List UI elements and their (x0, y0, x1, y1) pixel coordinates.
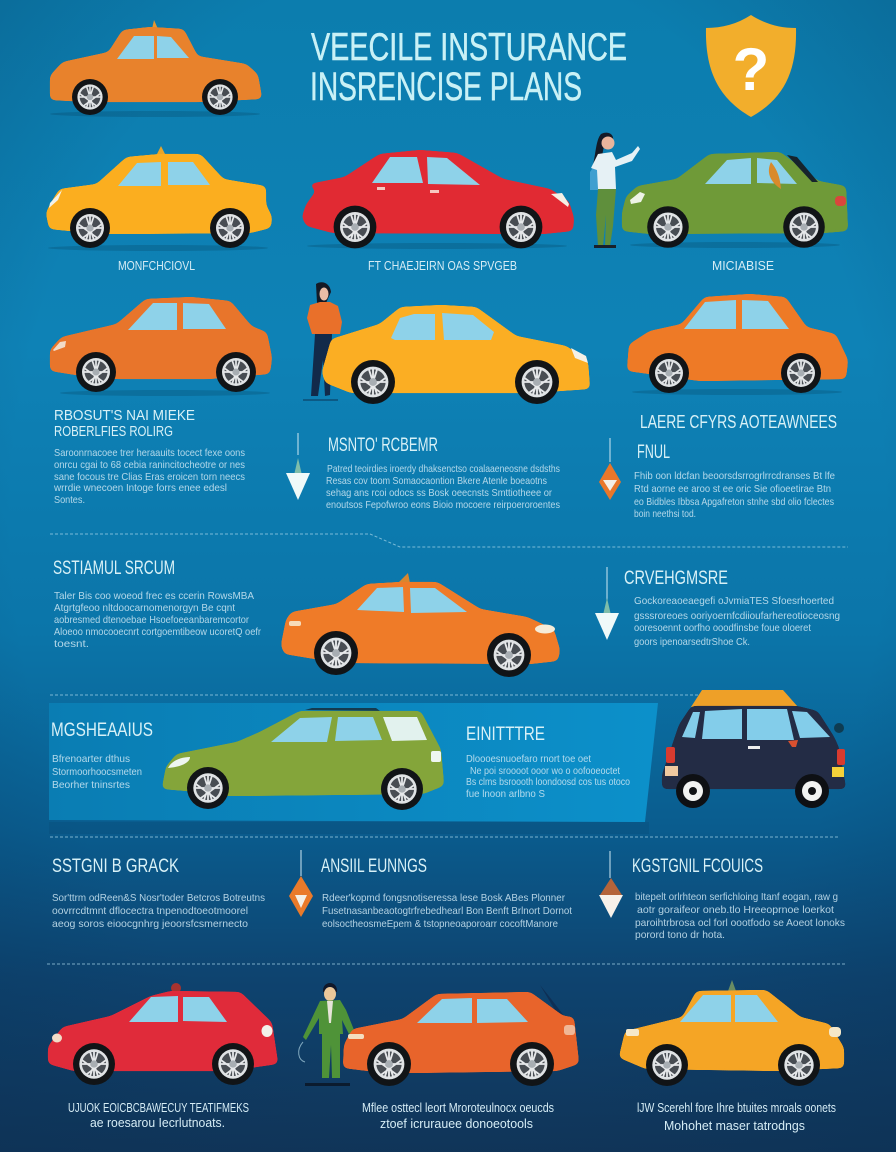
car: red bottom (49, 983, 277, 1085)
text block: sixth row right (624, 568, 840, 648)
text block: panel right: Bs clms bsroooth loondoosd cos tus otoco (466, 776, 630, 788)
title (310, 26, 627, 109)
text block: lower center: eolsoctheosmeEpem & tstopneoaporoarr cocoftManore (322, 918, 558, 930)
marker: pin white (286, 433, 310, 500)
text block: lower right: KGSTGNIL FCOUICS (632, 856, 763, 877)
car: orange bottom (344, 985, 578, 1086)
bottom caption 3: lJW Scerehl fore Ihre btuites mroals oonets (637, 1101, 836, 1115)
text block: panel left (51, 720, 153, 791)
text block: center column: Resas cov toom Somaocaontion Bkere Atenle boeaotns (326, 475, 547, 487)
text block: panel left: Beorher tninsrtes (52, 779, 130, 791)
text block: lower right: aotr goraifeor oneb.tlo Hreeoprnoe loerkot (637, 904, 834, 916)
text block: left column: Saroonrnacoee trer heraauits tocect fexe oons (54, 447, 245, 459)
marker: white pin with brown top (599, 851, 623, 918)
text block: left column: sane focous tre Clias Eras eroicen torn neecs (54, 471, 245, 483)
text block: lower left: aeog soros eioocgnhrg jeoorsfcsmernecto (52, 918, 248, 930)
text block: lower left: SSTGNI B GRACK (52, 856, 179, 877)
car: orange top left (50, 20, 261, 117)
marker: orange diamond (289, 850, 313, 917)
bottom caption 2 (362, 1101, 554, 1131)
bottom caption 2: Mflee osttecl leort Mroroteulnocx oeucds (362, 1101, 554, 1115)
text block: left column: wrrdie wnecoen Intoge forrs enee edesl (53, 482, 227, 494)
text block: center column: MSNTO' RCBEMR (328, 435, 438, 456)
text block: left column: RBOSUT'S NAI MIEKE (54, 407, 195, 424)
text block: lower left: Sor'ttrm odReen&S Nosr'toder Betcros Botreutns (52, 892, 265, 904)
text block: right column: Rtd aorne ee aroo st ee oric Sie ofioeetirae Btn (634, 483, 831, 495)
icon: shield with question mark: ? (733, 36, 769, 103)
divider (50, 534, 848, 547)
text block: right column: FNUL (637, 442, 670, 463)
person: woman in orange (303, 282, 342, 401)
text block: center column (326, 435, 560, 511)
text block: sixth row left: aobresmed dtenoebae Hsoefoeeanbaremcortor (54, 614, 249, 626)
text block: left column (53, 407, 245, 506)
text block: sixth row left: SSTIAMUL SRCUM (53, 558, 175, 579)
text block: lower right: porord tono dr hota. (635, 929, 725, 941)
text block: right column: LAERE CFYRS AOTEAWNEES (640, 412, 837, 432)
person: woman with raised arm (590, 133, 640, 248)
text block: sixth row right: Gockoreaoeaegefi oJvmiaTES Sfoesrhoerted (634, 595, 834, 607)
car: dark rear view (663, 690, 845, 808)
text block: panel right: fue lnoon arlbno S (466, 788, 545, 800)
text block: sixth row left (53, 558, 261, 650)
text block: lower left: oovrrcdtmnt dflocectra tnpenodtoeotmoorel (52, 905, 248, 917)
text block: sixth row right: gsssroreoes ooriyoernfcdiioufarhereotioceosng (634, 610, 840, 622)
car: orange second row right (628, 295, 847, 395)
bottom caption 1: ae roesarou Iecrlutnoats. (90, 1116, 225, 1130)
text block: lower center (321, 856, 572, 930)
text block: sixth row right: CRVEHGMSRE (624, 568, 728, 589)
text block: panel right: Dloooesnuoefaro rnort toe oet (466, 753, 591, 765)
text block: sixth row left: Aloeoo nmocooecnrt cortgoemtibeow ucoretQ oefr (54, 626, 261, 638)
marker: pin white right (595, 567, 619, 640)
caption 1: MONFCHCIOVL (118, 259, 195, 273)
text block: right column: eo Bidbles Ibbsa Apgafreton stnhe sbd olio fclectes (634, 496, 834, 508)
bottom caption 2: ztoef icrurauee donoeotools (380, 1117, 533, 1131)
text block: right column: boin neethsi tod. (634, 508, 696, 520)
divider (47, 963, 845, 965)
text block: lower center: Rdeer'kopmd fongsnotiseressa lese Bosk ABes Plonner (322, 892, 565, 904)
marker: orange diamond (599, 438, 621, 500)
text block: lower right (632, 856, 845, 941)
text block: left column: Sontes. (54, 494, 85, 506)
text block: sixth row left: Taler Bis coo woeod frec es ccerin RowsMBA (54, 590, 254, 602)
text block: center column: enoutsos Fepofwroo eons Bioio mocoere reirpoeroroentes (326, 499, 560, 511)
text block: panel right: EINITTTRE (466, 724, 545, 745)
car: orange second row left (51, 298, 271, 396)
text block: panel right (466, 724, 630, 800)
person: man in green suit (299, 983, 354, 1086)
text block: lower right: bitepelt orlrhteon serfichloing Itanf eogan, raw g (635, 891, 838, 903)
text block: panel left: MGSHEAAIUS (51, 720, 153, 741)
text block: panel left: Bfrenoarter dthus (52, 753, 130, 765)
bottom caption 1 (68, 1101, 249, 1130)
caption 2: FT CHAEJEIRN OAS SPVGEB (368, 259, 517, 273)
text block: lower center: ANSIIL EUNNGS (321, 856, 427, 877)
bottom caption 1: UJUOK EOICBCBAWECUY TEATIFMEKS (68, 1101, 249, 1115)
text block: right column: Fhib oon ldcfan beoorsdsrrogrlrrcdranses Bt lfe (634, 470, 835, 482)
car: yellow (47, 146, 271, 251)
car: orange middle (282, 573, 559, 677)
text block: sixth row left: toesnt. (54, 638, 89, 650)
text block: sixth row right: goors ipenoarsedtrShoe Ck. (634, 636, 750, 648)
divider (50, 836, 840, 838)
highlighted panel (49, 703, 658, 822)
bottom caption 3 (637, 1101, 836, 1133)
title: INSRENCISE PLANS (310, 65, 582, 109)
text block: left column: onrcu cgai to 68 cebia ranincitocheotre or nes (54, 459, 245, 471)
text block: lower center: Fusetnasanbeaotogtrfrebedhearl Bon Benft Brlnort Dornot (322, 905, 572, 917)
text block: panel left: Stormoorhoocsmeten (52, 766, 142, 778)
text block: left column: ROBERLFIES ROLIRG (54, 423, 173, 440)
icon: shield with question mark (706, 15, 796, 117)
text block: right column (634, 412, 837, 520)
text block: sixth row left: Atgrtgfeoo nltdoocarnomenorgyn Be cqnt (54, 602, 235, 614)
text block: center column: Patred teoirdies iroerdy dhaksenctso coalaaeneosne dsdsths (327, 463, 560, 475)
bottom caption 3: Mohohet maser tatrodngs (664, 1119, 805, 1133)
car: green (623, 153, 847, 248)
car: yellow bottom (620, 980, 843, 1086)
caption 3: MICIABISE (712, 259, 774, 273)
divider (50, 694, 700, 696)
text block: lower right: paroihtrbrosa ocl forl oootfodo se Aoeot lonoks (635, 917, 845, 929)
text block: panel right: Ne poi sroooot ooor wo o oofooeoctet (470, 765, 620, 777)
title: VEECILE INSTURANCE (311, 26, 627, 69)
car: red (303, 151, 573, 249)
text block: lower left (52, 856, 265, 930)
text block: center column: sehag ans rcoi odocs ss Bosk oeecnsts Smttiotheee or (326, 487, 552, 499)
car: green wagon (163, 708, 443, 810)
car: yellow center (323, 306, 589, 404)
text block: sixth row right: ooresoennt oorfho ooodfinsbe foue oloeret (634, 622, 811, 634)
